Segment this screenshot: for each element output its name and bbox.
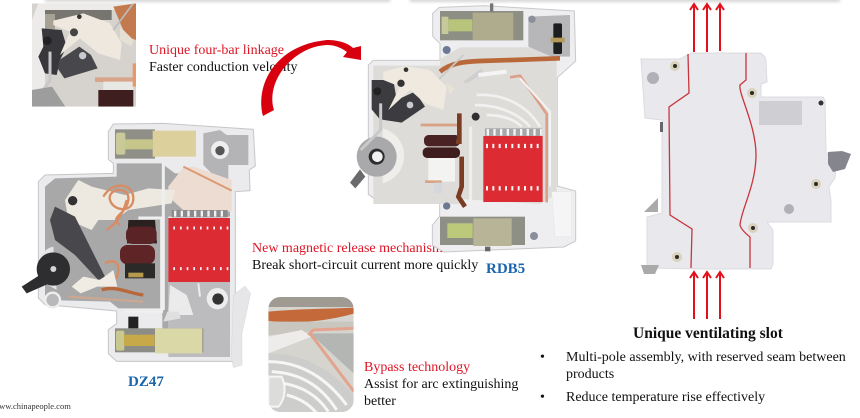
handle screw: [828, 151, 851, 172]
RDB5 wall and copper conductor: [471, 127, 521, 212]
DZ47 arc extinguishing stack: [168, 210, 230, 282]
text: magnetic release mechanism: [252, 241, 478, 273]
DZ47 upper-right cavity: [203, 130, 248, 183]
label: DZ47: DZ47: [128, 374, 164, 390]
RDB5 bottom terminal: [440, 202, 538, 251]
DZ47 inner cavity: [45, 163, 230, 348]
bullet list: Reduce temperature rise effectively: [566, 390, 765, 405]
top edge shadow: [45, 0, 840, 2]
RDB5 arc extinguishing stack: [483, 128, 543, 202]
bullet list: •: [540, 390, 545, 405]
text: bypass technology: [364, 360, 518, 409]
DZ47 handle knob: [22, 247, 70, 307]
DZ47 top terminal: [115, 129, 196, 159]
text: bypass technology: Bypass technology: [364, 360, 470, 375]
RDB5 mechanism lever: [372, 66, 483, 123]
RDB5 handle knob: [350, 103, 404, 188]
side-view breaker with ventilating slot: [641, 53, 851, 274]
ventilating slot lines: [669, 53, 756, 268]
RDB5 top terminal: [440, 3, 523, 40]
RDB5 arc runner fins: [475, 95, 540, 127]
red airflow arrows: in at bottom: [690, 272, 724, 319]
RDB5 housing: [368, 6, 576, 252]
DZ47 bottom terminal: [115, 312, 203, 353]
inset photo: bypass detail: [268, 297, 354, 415]
text: four-bar linkage: Unique four-bar linkage: [149, 43, 284, 58]
bullet list: products: [566, 367, 614, 382]
DZ47 lever: [65, 180, 175, 230]
text: bypass technology: Assist for arc extinguishing: [364, 377, 518, 392]
text: four-bar linkage: [149, 43, 298, 75]
text: magnetic release mechanism: Break short-circuit current more quickly: [252, 258, 478, 273]
text: bypass technology: better: [364, 394, 396, 409]
breaker: RDB5 cross-section: [350, 3, 576, 252]
RDB5 bottom right cavity: [552, 192, 572, 237]
curved red arrow: [261, 40, 361, 116]
bullet list: Multi-pole assembly, with reserved seam between: [566, 350, 846, 365]
heading: ventilating slot: Unique ventilating slot: [633, 325, 784, 342]
side-view housing: [641, 53, 836, 269]
red airflow arrows: out at top: [690, 4, 724, 52]
bullet list: [540, 350, 846, 405]
DZ47 housing: [38, 123, 255, 361]
RDB5 contact post: [443, 16, 565, 54]
text: magnetic release mechanism: New magnetic release mechanism: [252, 241, 443, 256]
DZ47 magnetic coils: [120, 220, 157, 278]
text: four-bar linkage: Faster conduction velocity: [149, 60, 298, 75]
bullet list: •: [540, 350, 545, 365]
RDB5 copper braid: [440, 58, 560, 72]
RDB5 magnetic coil: [421, 113, 465, 207]
DZ47 copper braid: [102, 186, 143, 295]
breaker: DZ47 cross-section: [22, 123, 255, 368]
DZ47 side clip: [231, 286, 251, 368]
DZ47 copper plate: [168, 167, 232, 212]
inset photo: four-bar linkage detail: [32, 3, 136, 107]
RDB5 mechanism cavity: [373, 47, 557, 204]
screw holes: [672, 62, 820, 260]
DZ47 arc chute: [168, 282, 230, 357]
label: RDB5: RDB5: [486, 261, 525, 277]
DZ47 wall: [123, 163, 163, 311]
DZ47 lower white links: [72, 270, 117, 293]
RDB5 upper right cavity: [528, 15, 570, 57]
